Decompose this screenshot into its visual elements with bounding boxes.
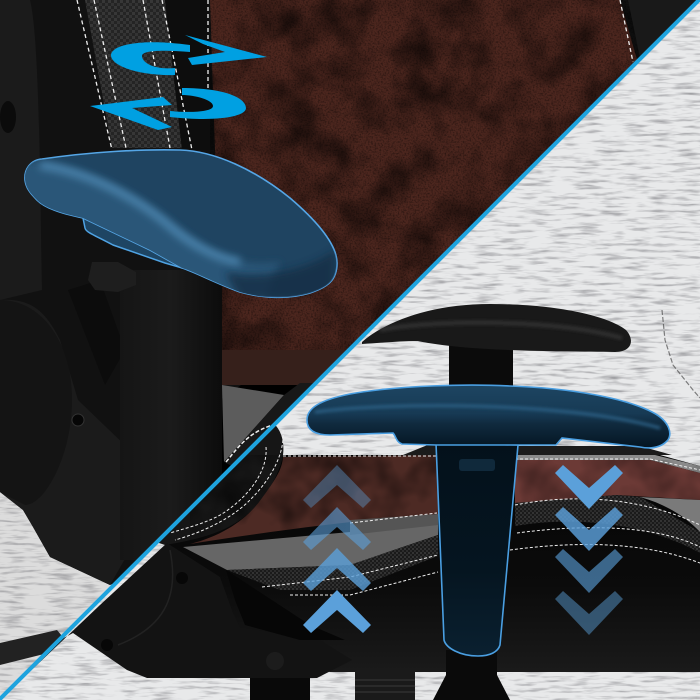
gas lift base: [355, 650, 510, 700]
back armrest, black: [362, 304, 631, 390]
dark shoulder: [628, 0, 694, 56]
pad shading: [20, 160, 335, 310]
left curved stitching: [170, 430, 283, 540]
gray seat panel upper shade: [350, 514, 438, 535]
gray panel stitching: [226, 423, 280, 462]
brown leather back: [210, 0, 637, 350]
pillar: [120, 270, 222, 560]
seat gray top band: [515, 455, 700, 473]
armrest pad: [25, 150, 337, 297]
adjuster stalk: [68, 280, 125, 385]
carbon fibre side bolster, right: [515, 495, 700, 553]
gray seat panel: [183, 525, 438, 570]
seat stitching: [262, 456, 700, 595]
carbon fibre side bolster, left: [227, 535, 438, 590]
rear seat vents: [403, 446, 672, 455]
seat gray right patch: [640, 497, 700, 532]
adjuster knob: [88, 262, 136, 292]
side bolster: [158, 426, 284, 545]
chevrons: arrows pointing up: [303, 465, 371, 633]
leather edge stitching: [620, 0, 633, 62]
armrest pad: [307, 385, 670, 448]
ridge highlight: [40, 165, 240, 262]
brown leather seat band: [190, 455, 700, 544]
reclining mechanism, black: [33, 544, 344, 700]
lower-left lighter side of pad: [20, 160, 280, 310]
rotation arrow: counter-clockwise, lower: [90, 88, 246, 130]
gray lower panel: [222, 385, 284, 462]
back stitching: [77, 0, 208, 150]
chevrons: arrows pointing down: [555, 465, 623, 635]
seat black base: [165, 455, 700, 672]
side plate bolt: [0, 101, 16, 133]
caster arm: [0, 630, 62, 665]
dark bolster strip along the divider: [224, 383, 313, 466]
side plate: [0, 0, 42, 300]
carbon fibre back panel: [85, 0, 182, 148]
pivot housing: [0, 300, 130, 585]
inner black seam panel: [166, 5, 182, 148]
front shadow: [225, 250, 335, 300]
armrest underside bracket: [83, 205, 215, 268]
seat cushion: [150, 420, 700, 672]
pad highlight: [315, 406, 660, 428]
post clip: [459, 459, 495, 471]
brown fuzzy lower back: [222, 350, 346, 385]
lower-right armrest, highlighted blue: [307, 385, 670, 656]
rotation arrow: clockwise, upper: [111, 35, 267, 75]
upper-left armrest, highlighted blue: [20, 150, 337, 310]
armrest post: [436, 443, 518, 656]
plaster wall background, bottom left: [0, 492, 112, 696]
